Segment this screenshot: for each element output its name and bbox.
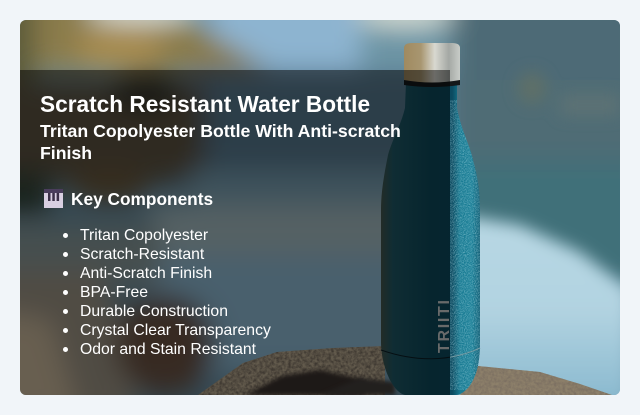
dark text overlay xyxy=(20,70,450,395)
rock xyxy=(198,346,612,395)
feature list: Scratch-Resistant xyxy=(80,246,204,263)
section heading: key components: Key Components xyxy=(71,189,213,209)
feature list: Tritan Copolyester xyxy=(80,227,208,244)
bottle logo: TRIITI xyxy=(436,300,453,353)
subtitle: Tritan Copolyester Bottle With Anti-scratch Finish xyxy=(40,121,401,163)
feature list: Durable Construction xyxy=(80,303,228,320)
feature list xyxy=(63,227,271,358)
title: Scratch Resistant Water Bottle xyxy=(40,91,370,117)
feature list: Crystal Clear Transparency xyxy=(80,322,271,339)
feature list: Odor and Stain Resistant xyxy=(80,341,256,358)
icon: piano keys xyxy=(44,189,63,208)
feature list: BPA-Free xyxy=(80,284,148,301)
feature list: Anti-Scratch Finish xyxy=(80,265,212,282)
bottle xyxy=(381,43,485,395)
